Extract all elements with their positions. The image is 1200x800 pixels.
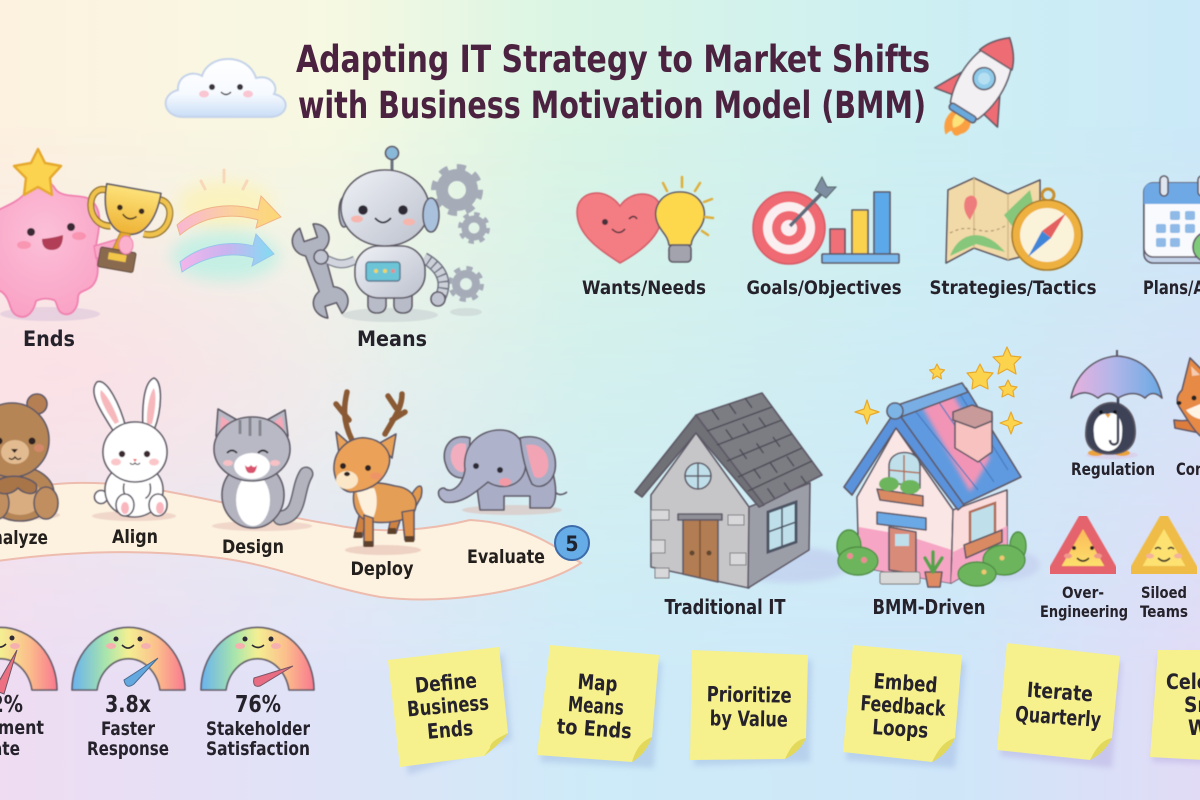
icon: trophy bbox=[80, 182, 173, 277]
gauge: faster response: Faster bbox=[101, 718, 156, 740]
label: siloed teams: Teams bbox=[1140, 602, 1188, 621]
robot screen bbox=[366, 262, 400, 281]
gauge: stakeholder satisfaction: Satisfaction bbox=[206, 738, 310, 760]
character: cat bbox=[212, 409, 312, 531]
sticky note: prioritize by value: by Value bbox=[710, 706, 788, 732]
label: siloed teams bbox=[1140, 583, 1188, 621]
sticky note: define business ends bbox=[388, 647, 512, 775]
label: evaluate: Evaluate bbox=[467, 546, 545, 568]
icon: map and compass bbox=[946, 178, 1082, 270]
label: goals objectives: Goals/Objectives bbox=[746, 277, 902, 299]
gauge: faster response: 3.8x bbox=[105, 692, 152, 718]
label: design: Design bbox=[222, 536, 284, 558]
house: traditional IT bbox=[635, 393, 850, 588]
icon: gold star bbox=[14, 149, 61, 195]
icon: calendar bbox=[1144, 176, 1200, 263]
robot body bbox=[355, 246, 425, 298]
label: traditional IT: Traditional IT bbox=[664, 595, 786, 619]
title: with Business Motivation Model (BMM) bbox=[298, 84, 926, 127]
left bush bbox=[837, 530, 878, 575]
label: wants needs: Wants/Needs bbox=[582, 277, 706, 299]
gauge: stakeholder satisfaction bbox=[201, 627, 314, 760]
sticky note: prioritize by value: Prioritize bbox=[706, 682, 792, 708]
sticky note: map means to ends: Means bbox=[567, 692, 625, 720]
gauge: faster response: Response bbox=[87, 738, 169, 760]
icon: heart and bulb bbox=[577, 177, 713, 263]
icon: wrench bbox=[289, 220, 353, 321]
sticky note: define business ends: Business bbox=[406, 690, 490, 721]
label: regulation: Regulation bbox=[1071, 460, 1155, 480]
sticky note: iterate quarterly: Quarterly bbox=[1014, 702, 1102, 732]
warning triangle: over-engineering bbox=[1053, 519, 1113, 571]
sticky note: embed feedback loops: Loops bbox=[872, 715, 929, 743]
house: BMM-driven bbox=[837, 383, 1040, 587]
badge: step 5: 5 bbox=[565, 532, 579, 556]
chimney bbox=[955, 410, 992, 462]
icons: gears bbox=[434, 167, 488, 300]
label: strategies tactics: Strategies/Tactics bbox=[930, 277, 1096, 299]
label: deploy: Deploy bbox=[350, 558, 414, 580]
sticky note: embed feedback loops bbox=[843, 645, 966, 768]
label: ends: Ends bbox=[23, 327, 75, 351]
arrows: ends to means bbox=[171, 170, 281, 281]
sticky note: celebrate small wins bbox=[1150, 650, 1200, 764]
gauge: alignment rate bbox=[0, 627, 57, 760]
icon: cloud bbox=[166, 59, 286, 117]
sticky note: map means to ends: Map bbox=[577, 670, 618, 696]
character: elephant bbox=[438, 430, 567, 515]
robot head bbox=[341, 170, 429, 246]
title: Adapting IT Strategy to Market Shifts bbox=[296, 38, 930, 81]
icon: pink star blob bbox=[0, 180, 99, 317]
gauge: stakeholder satisfaction: Stakeholder bbox=[206, 718, 310, 740]
path ribbon bbox=[0, 483, 581, 600]
door bbox=[889, 527, 916, 574]
gauge: stakeholder satisfaction: 76% bbox=[235, 692, 281, 718]
sticky note: iterate quarterly: Iterate bbox=[1026, 678, 1094, 706]
warning triangle: siloed teams bbox=[1134, 519, 1194, 571]
right bush bbox=[958, 532, 1026, 586]
sticky note: prioritize by value bbox=[690, 650, 812, 766]
badge: step 5 bbox=[555, 526, 589, 560]
icon: rocket bbox=[917, 18, 1041, 156]
label: over-engineering: Engineering bbox=[1040, 602, 1128, 621]
sticky note: embed feedback loops: Embed bbox=[873, 669, 938, 697]
title bbox=[296, 38, 930, 127]
fox bbox=[1174, 358, 1200, 440]
gauge: faster response bbox=[72, 627, 185, 760]
stars around house bbox=[855, 347, 1022, 434]
icon: target with bars bbox=[753, 177, 899, 264]
sticky note: map means to ends bbox=[537, 645, 662, 768]
sticky note: iterate quarterly bbox=[997, 643, 1122, 768]
label: over-engineering: Over- bbox=[1062, 583, 1104, 602]
panel: ends character with trophy bbox=[0, 149, 173, 321]
sticky note: define business ends: Ends bbox=[426, 716, 474, 744]
character: bear bbox=[0, 394, 60, 521]
label: means: Means bbox=[357, 327, 427, 351]
character: rabbit bbox=[92, 378, 176, 521]
sticky note: map means to ends: to Ends bbox=[556, 714, 633, 744]
sticky note: embed feedback loops: Feedback bbox=[860, 691, 947, 721]
label: siloed teams: Siloed bbox=[1141, 583, 1187, 602]
label: over-engineering bbox=[1040, 583, 1128, 621]
panel: means robot bbox=[289, 146, 488, 322]
penguin with umbrella bbox=[1071, 350, 1162, 459]
sticky note: define business ends: Define bbox=[414, 668, 478, 698]
label: align: Align bbox=[112, 526, 158, 548]
label: BMM-driven: BMM-Driven bbox=[872, 595, 986, 619]
arch window bbox=[889, 452, 920, 488]
character: deer bbox=[334, 392, 422, 555]
